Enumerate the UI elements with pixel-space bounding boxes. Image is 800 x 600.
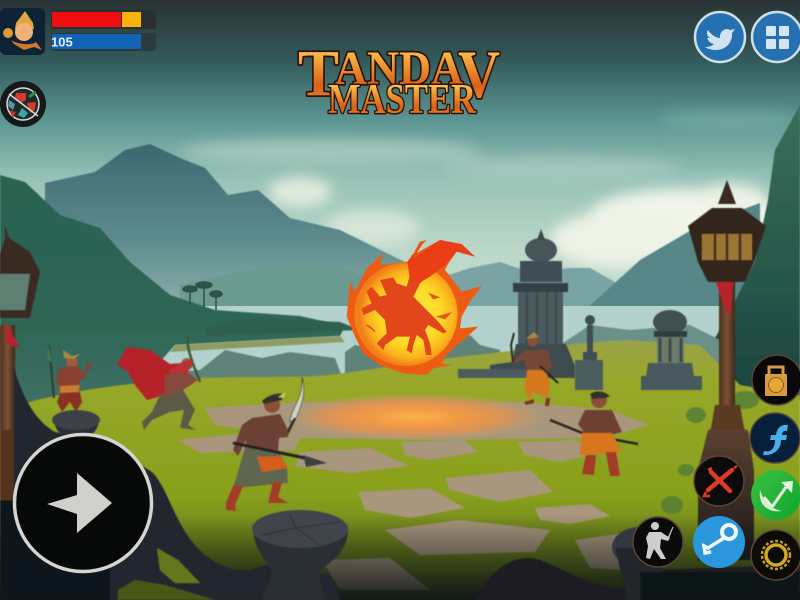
orange glow on ground bbox=[283, 393, 547, 441]
fire disc bbox=[354, 263, 458, 366]
icon: key button bbox=[693, 516, 745, 568]
title bbox=[298, 36, 500, 123]
skirt bbox=[233, 447, 288, 488]
stone pavement bbox=[178, 402, 650, 590]
torso and arms bbox=[233, 414, 288, 456]
warrior: red cape bbox=[117, 337, 200, 430]
small domed shrine bbox=[641, 310, 702, 390]
griffin body bbox=[362, 253, 448, 355]
lake bbox=[100, 306, 740, 386]
head bbox=[264, 397, 280, 413]
temple tower bbox=[458, 229, 575, 378]
green cliff right bbox=[690, 105, 800, 400]
right lantern post bbox=[688, 180, 766, 560]
griffin wing bbox=[407, 240, 475, 283]
warrior: front right bbox=[550, 391, 638, 476]
warrior: front center bbox=[226, 377, 327, 511]
flames bbox=[347, 240, 482, 375]
hero portrait bbox=[0, 8, 45, 55]
clouds bbox=[180, 111, 800, 268]
left lantern post bbox=[0, 226, 40, 500]
left balustrade bbox=[0, 368, 340, 600]
small shrine lamp bbox=[575, 315, 603, 390]
icon: gear button bbox=[751, 530, 800, 580]
warrior: right of fireball bbox=[511, 332, 558, 406]
title line: TANDAV: ANDA bbox=[335, 42, 463, 95]
icon: fighter stance button bbox=[633, 517, 683, 567]
arrow bbox=[47, 473, 112, 533]
icon: green arrow button bbox=[751, 470, 800, 520]
title line: TANDAV: T bbox=[298, 37, 339, 110]
joystick arrow button bbox=[14, 434, 152, 572]
distant mountains bbox=[45, 144, 760, 330]
green hills left bbox=[0, 175, 345, 430]
icon: elements disc bbox=[0, 81, 46, 127]
stone pedestal left bbox=[52, 410, 100, 442]
title line: TANDAV: V bbox=[458, 36, 500, 112]
icon: twitter button bbox=[695, 12, 745, 62]
fireball griffin emblem bbox=[347, 240, 482, 375]
far shore trees bbox=[135, 318, 720, 385]
boots bbox=[226, 482, 288, 511]
icon: grid button bbox=[752, 12, 800, 62]
spear bbox=[233, 443, 305, 458]
icon: lock button bbox=[752, 355, 800, 405]
warrior: small left bbox=[47, 343, 92, 412]
grass field bbox=[0, 340, 800, 600]
stone pedestal center bbox=[252, 510, 348, 600]
right balustrade bbox=[475, 527, 800, 600]
mana value: 105 bbox=[51, 34, 73, 50]
mana bar bbox=[51, 33, 156, 51]
blade bbox=[290, 377, 304, 422]
icon: blue f button bbox=[750, 413, 800, 463]
dark bottom shading bbox=[0, 515, 800, 600]
health bar bbox=[51, 10, 156, 29]
leaf bushes bbox=[661, 391, 759, 514]
palms bbox=[183, 282, 222, 310]
title line: MASTER: MASTER bbox=[328, 77, 477, 123]
icon: red crossed bones button bbox=[694, 456, 744, 506]
